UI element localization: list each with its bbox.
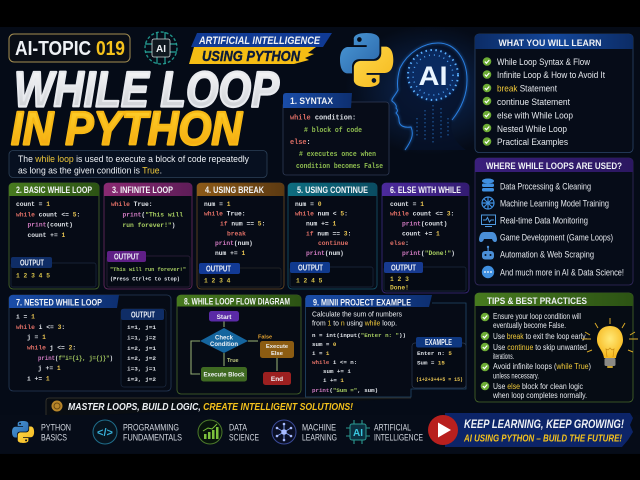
output xyxy=(290,262,373,287)
icon: AI chip xyxy=(145,32,177,64)
syntax heading: 1. SYNTAX xyxy=(290,96,334,107)
code: print(count) xyxy=(28,222,73,228)
node: execute else xyxy=(260,341,294,358)
code: while j <= 2: xyxy=(27,344,76,352)
code: sum += i xyxy=(323,368,351,375)
tips heading xyxy=(475,293,633,307)
node: end: End xyxy=(271,376,283,383)
topic: data science: DATA xyxy=(229,422,247,432)
node: execute block: Execute Block xyxy=(203,372,245,378)
code xyxy=(16,314,113,382)
syntax code: condition becomes False xyxy=(296,163,383,171)
syntax code: while condition: xyxy=(290,114,356,122)
code: print(f"i={i}, j={j}") xyxy=(38,355,113,362)
tips list: Use break to exit the loop early. xyxy=(493,332,587,341)
icon: AI chip: AI xyxy=(156,44,166,55)
code: while num < 5: xyxy=(295,210,348,218)
code: count += 1 xyxy=(28,232,66,239)
icon: play button xyxy=(428,415,458,445)
icon: monitor xyxy=(482,215,496,226)
panel: nested while loop xyxy=(9,295,171,391)
code xyxy=(111,201,183,229)
output: i=3, j=2 xyxy=(127,376,157,383)
where list xyxy=(500,181,624,277)
tips list: when loop completes normally. xyxy=(492,391,587,400)
footer strip xyxy=(0,415,640,453)
tips list: unless necessary. xyxy=(493,371,539,380)
code: while count <= 3: xyxy=(390,210,454,218)
intro text block xyxy=(9,150,267,178)
panel: what you will learn xyxy=(475,34,633,152)
output: 1 2 3 4 xyxy=(204,278,231,284)
code: while i <= n: xyxy=(312,359,357,366)
code: print("Done!") xyxy=(402,250,455,257)
output: 1 2 3 xyxy=(390,276,409,283)
panel: where while loops are used xyxy=(475,158,633,285)
output xyxy=(384,262,466,292)
output xyxy=(11,257,96,287)
topic: programming fundamentals xyxy=(93,420,182,444)
example output: Enter n: 5 xyxy=(417,350,452,357)
learn heading xyxy=(475,34,633,49)
intro text block: as long as the given condition is True. xyxy=(18,166,162,176)
learn checklist: While Loop Syntax & Flow xyxy=(497,57,590,67)
syntax code: # executes once when xyxy=(299,151,376,159)
node: start: Start xyxy=(217,314,232,321)
code xyxy=(312,332,406,394)
icon: gamepad xyxy=(479,232,497,242)
topic: artificial intelligence: INTELLIGENCE xyxy=(374,432,423,442)
output: 1 2 3 4 5 xyxy=(16,272,50,280)
node: check condition: Condition xyxy=(210,342,238,348)
topic: programming fundamentals: PROGRAMMING xyxy=(123,422,179,432)
motto banner: MASTER LOOPS, BUILD LOGIC, CREATE INTELLIGENT SOLUTIONS! xyxy=(68,401,353,413)
syntax code: else: xyxy=(290,139,311,147)
title: WHILE LOOP xyxy=(14,62,280,118)
code: continue xyxy=(318,240,348,247)
topic: python basics: PYTHON xyxy=(41,422,71,432)
icon: light bulb xyxy=(582,318,638,368)
label: false: False xyxy=(258,334,272,340)
panel: flow diagram xyxy=(177,295,301,394)
code: print(num) xyxy=(215,240,253,247)
output: OUTPUT xyxy=(391,264,416,272)
output: i=2, j=1 xyxy=(127,345,157,352)
code xyxy=(295,201,351,257)
output: OUTPUT xyxy=(131,310,155,320)
code xyxy=(16,201,80,239)
learn checklist: Practical Examples xyxy=(497,137,568,147)
heading: 5. USING CONTINUE xyxy=(297,185,368,195)
banner: artificial intelligence using python xyxy=(189,33,332,65)
intro text block: The while loop is used to execute a block of code repeatedly xyxy=(18,154,250,164)
tips list xyxy=(481,312,591,400)
output: OUTPUT xyxy=(20,258,44,268)
learn checklist: Nested While Loop xyxy=(497,124,567,134)
flow arrows xyxy=(191,321,277,374)
node: execute else: Else xyxy=(271,351,284,357)
heading: 7. NESTED WHILE LOOP xyxy=(16,297,102,307)
topic: programming fundamentals: </> xyxy=(97,427,113,439)
output: OUTPUT xyxy=(298,264,323,272)
topic: artificial intelligence: AI xyxy=(353,428,363,439)
learn checklist: continue Statement xyxy=(497,97,570,107)
code: break xyxy=(227,230,246,238)
code: j = 1 xyxy=(27,334,46,341)
icon: brain xyxy=(482,197,494,209)
tips list: Use else block for clean logic xyxy=(493,382,583,391)
learn checklist xyxy=(483,57,605,147)
code: while i <= 3: xyxy=(16,324,65,331)
example output: EXAMPLE xyxy=(425,338,452,347)
banner: artificial intelligence using python: ARTIFICIAL INTELLIGENCE xyxy=(198,35,321,47)
topic: machine learning: MACHINE xyxy=(302,422,336,432)
panel: else with while xyxy=(382,183,469,293)
panel: using continue xyxy=(288,183,377,289)
topic: machine learning xyxy=(272,420,337,444)
heading: 9. MINII PROJECT EXAMPLE xyxy=(313,297,411,307)
output xyxy=(121,309,166,387)
task description: Calculate the sum of numbers xyxy=(312,310,402,318)
code: sum = 0 xyxy=(312,341,337,348)
code: run forever!") xyxy=(122,222,175,229)
where list: Machine Learning Model Training xyxy=(500,198,609,208)
output: Done! xyxy=(390,284,409,292)
tips list: Use continue to skip unwanted xyxy=(493,343,587,352)
output: i=1, j=2 xyxy=(127,334,157,342)
code: count = 1 xyxy=(16,201,50,208)
icon: robot xyxy=(482,246,494,260)
output: 1 2 4 5 xyxy=(296,278,323,284)
example output: (1+2+3+4+5 = 15) xyxy=(416,376,463,383)
task description xyxy=(312,310,402,328)
topic: python basics xyxy=(12,421,71,443)
topic: data science: SCIENCE xyxy=(229,432,259,442)
icon: AI head xyxy=(392,43,467,150)
code: print(num) xyxy=(306,250,344,257)
code xyxy=(390,201,455,257)
task description: from 1 to n using while loop. xyxy=(312,318,397,328)
code: num = 1 xyxy=(204,201,231,208)
icon: brain coin xyxy=(52,400,62,412)
tips list: Ensure your loop condition will xyxy=(493,312,581,321)
code: i += 1 xyxy=(323,377,344,384)
code: i = 1 xyxy=(312,350,330,357)
topic: programming fundamentals: FUNDAMENTALS xyxy=(123,432,182,442)
heading: 3. INFINITE LOOP xyxy=(112,185,173,195)
code: print("This will xyxy=(122,212,183,218)
learn checklist: Infinite Loop & How to Avoid It xyxy=(497,70,605,80)
output xyxy=(199,263,281,287)
call to action banner xyxy=(428,413,633,447)
node: check condition: Check xyxy=(215,336,234,342)
example output: Sum = 15 xyxy=(417,360,445,366)
code: n = int(input("Enter n: ")) xyxy=(312,332,406,339)
code: num += 1 xyxy=(306,220,336,228)
code: i += 1 xyxy=(27,376,50,382)
syntax code xyxy=(290,114,383,171)
panel: basic while loop xyxy=(9,183,99,289)
learn checklist: else with While Loop xyxy=(497,110,573,120)
panel: using break xyxy=(197,183,284,289)
tips list: iterations. xyxy=(493,352,514,361)
code xyxy=(204,201,265,257)
output: OUTPUT xyxy=(206,264,231,274)
code: num += 1 xyxy=(215,250,245,257)
label: true: True xyxy=(227,358,239,364)
code: print("Sum =", sum) xyxy=(312,387,378,394)
banner: artificial intelligence using python: USING PYTHON xyxy=(202,49,300,65)
syntax code: # block of code xyxy=(304,127,362,135)
icon: AI head: AI xyxy=(418,61,448,91)
code: while True: xyxy=(204,210,246,218)
where list: Game Development (Game Loops) xyxy=(500,232,613,242)
code: j += 1 xyxy=(38,365,61,372)
code: i = 1 xyxy=(16,314,35,320)
icon: python logo xyxy=(340,33,393,87)
heading: 4. USING BREAK xyxy=(205,185,264,195)
heading: 2. BASIC WHILE LOOP xyxy=(16,185,92,195)
learn checklist: break Statement xyxy=(497,83,557,93)
panel: mini project example xyxy=(306,295,466,397)
heading: 8. WHILE LOOP FLOW DIAGRAM xyxy=(184,296,290,306)
icon: more dots xyxy=(482,266,494,278)
heading xyxy=(9,295,119,308)
code: count += 1 xyxy=(402,230,440,238)
icon: database xyxy=(482,178,494,192)
code: else: xyxy=(390,240,409,247)
code: while count <= 5: xyxy=(16,212,80,218)
panel: tips and best practices xyxy=(475,293,638,402)
output: (Press Ctrl+C to stop) xyxy=(110,276,180,282)
code: count = 1 xyxy=(390,201,424,208)
title xyxy=(11,62,280,156)
code: if num == 3: xyxy=(306,230,351,238)
node: check condition xyxy=(200,328,248,353)
topic: artificial intelligence xyxy=(346,420,423,444)
learn heading: WHAT YOU WILL LEARN xyxy=(498,38,602,49)
where list: Data Processing & Cleaning xyxy=(500,181,591,191)
heading: 6. ELSE WITH WHILE xyxy=(390,185,461,195)
topic badge: AI-TOPIC 019 xyxy=(15,38,125,60)
node: execute else: Execute xyxy=(266,344,289,350)
output: i=2, j=2 xyxy=(127,355,157,362)
motto banner xyxy=(46,398,411,418)
panel: infinite loop xyxy=(104,183,192,289)
code: num = 0 xyxy=(295,201,322,208)
code: print(count) xyxy=(402,220,447,228)
where list: Automation & Web Scraping xyxy=(500,249,594,259)
topic: machine learning: LEARNING xyxy=(302,432,337,442)
topic: data science xyxy=(198,420,259,444)
topic: artificial intelligence: ARTIFICIAL xyxy=(374,422,411,432)
where list: Real-time Data Monitoring xyxy=(500,215,588,225)
tips list: Avoid infinite loops (while True) xyxy=(493,362,591,371)
tips heading: TIPS & BEST PRACTICES xyxy=(487,296,588,307)
topic: python basics: BASICS xyxy=(41,432,67,442)
panel: syntax xyxy=(283,93,389,175)
output: "This will run forever!" xyxy=(110,266,186,273)
code: if num == 5: xyxy=(220,220,265,228)
example output xyxy=(412,337,466,388)
tips list: eventually become False. xyxy=(493,321,566,330)
output: i=1, j=1 xyxy=(127,324,157,331)
title: IN PYTHON xyxy=(11,102,244,156)
output xyxy=(107,251,190,287)
output: OUTPUT xyxy=(114,252,139,262)
code: while True: xyxy=(111,201,153,208)
output: i=3, j=1 xyxy=(127,366,157,372)
